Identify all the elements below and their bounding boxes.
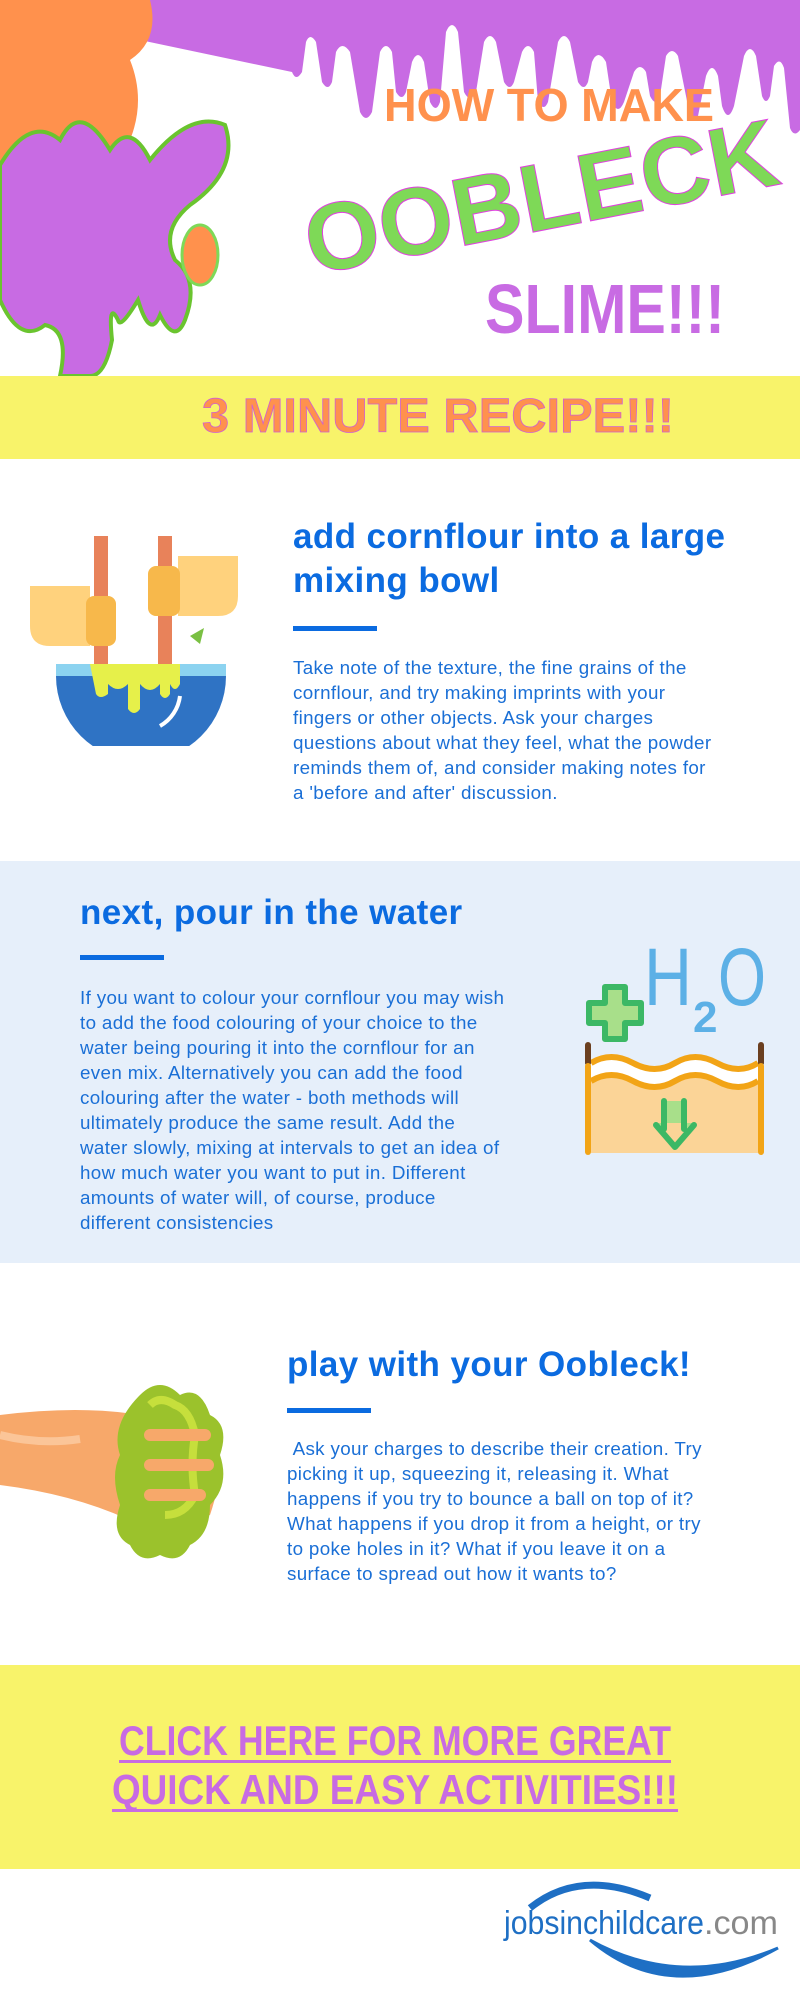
body text: fingers or other objects. Ask your charges (293, 707, 653, 728)
heading: next, pour in the water (80, 893, 463, 932)
body text: What happens if you drop it from a height, or try (287, 1513, 701, 1534)
body text: even mix. Alternatively you can add the food (80, 1062, 463, 1083)
icon: hand squeezing slime (0, 1385, 224, 1558)
body text: cornflour, and try making imprints with your (293, 682, 665, 703)
body text: reminds them of, and consider making notes for (293, 757, 706, 778)
body text: to add the food colouring of your choice to the (80, 1012, 478, 1033)
panel: step 2 (0, 861, 800, 1263)
icon: mixing bowl (30, 536, 238, 746)
splat purple (0, 122, 228, 376)
body text: how much water you want to put in. Different (80, 1162, 466, 1183)
title: slime: SLIME!!! (485, 270, 725, 348)
heading: play with your Oobleck! (287, 1345, 691, 1384)
body text: water slowly, mixing at intervals to get an idea of (80, 1137, 499, 1158)
logo: jobsinchildcare (503, 1904, 704, 1941)
panel: step 1 (0, 459, 800, 861)
header (0, 0, 800, 376)
banner: call to action: CLICK HERE FOR MORE GREAT (119, 1717, 671, 1764)
icon: H2O container (585, 941, 766, 1155)
body text: different consistencies (80, 1212, 274, 1233)
logo: .com (704, 1904, 778, 1941)
body text: ultimately produce the same result. Add the (80, 1112, 455, 1133)
body text: Take note of the texture, the fine grains of the (293, 657, 687, 678)
banner: 3 minute recipe: 3 MINUTE RECIPE!!! (202, 390, 674, 443)
banner: call to action (0, 1665, 800, 1869)
title: oobleck: OOBLECK (296, 99, 787, 296)
body text: colouring after the water - both methods will (80, 1087, 459, 1108)
body text (287, 1438, 702, 1584)
panel: step 3 (0, 1263, 800, 1665)
body text: amounts of water will, of course, produce (80, 1187, 436, 1208)
banner: 3 minute recipe (0, 376, 800, 459)
splat orange (0, 0, 152, 170)
icon: H2O container: 2 (693, 993, 717, 1042)
body text: Ask your charges to describe their creation. Try (293, 1438, 702, 1459)
body text: questions about what they feel, what the powder (293, 732, 711, 753)
body text: water being pouring it into the cornflour for an (80, 1037, 475, 1058)
drips (110, 0, 800, 134)
body text: picking it up, squeezing it, releasing it. What (287, 1463, 669, 1484)
title: how to make: HOW TO MAKE (384, 79, 714, 131)
heading: add cornflour into a large (293, 517, 725, 556)
body text: happens if you try to bounce a ball on top of it? (287, 1488, 694, 1509)
body text (80, 987, 504, 1233)
body text: If you want to colour your cornflour you may wish (80, 987, 504, 1008)
logo (503, 1882, 779, 1978)
heading: mixing bowl (293, 561, 500, 600)
body text (293, 657, 711, 803)
body text: a 'before and after' discussion. (293, 782, 558, 803)
body text: to poke holes in it? What if you leave it on a (287, 1538, 665, 1559)
heading (293, 517, 725, 600)
body text: surface to spread out how it wants to? (287, 1563, 617, 1584)
banner: call to action: QUICK AND EASY ACTIVITIES!!! (112, 1766, 678, 1813)
